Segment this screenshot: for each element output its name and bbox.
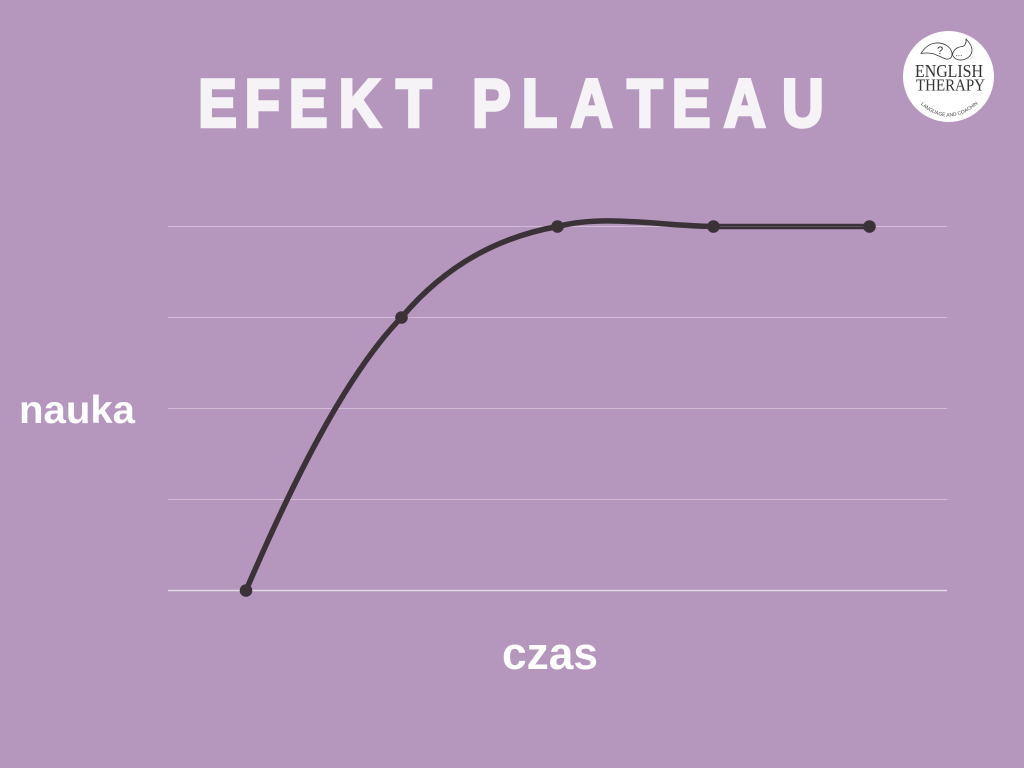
logo: English Therapy: THERAPY bbox=[916, 76, 985, 94]
logo: English Therapy: ... bbox=[956, 49, 962, 58]
grid lines bbox=[168, 226, 947, 590]
line chart bbox=[168, 220, 947, 597]
logo: English Therapy bbox=[903, 31, 994, 122]
x axis label: czas bbox=[502, 628, 598, 679]
y axis label: nauka bbox=[19, 389, 135, 432]
data line bbox=[246, 221, 870, 590]
logo wordmark: ENGLISH bbox=[915, 61, 983, 81]
title: EFEKT PLATEAU bbox=[198, 66, 824, 141]
plateau highlight bbox=[713, 226, 869, 228]
logo tagline bbox=[919, 103, 979, 116]
icon: speech bubbles bbox=[921, 39, 972, 60]
data points bbox=[240, 220, 876, 597]
logo: English Therapy: ? bbox=[937, 45, 943, 57]
